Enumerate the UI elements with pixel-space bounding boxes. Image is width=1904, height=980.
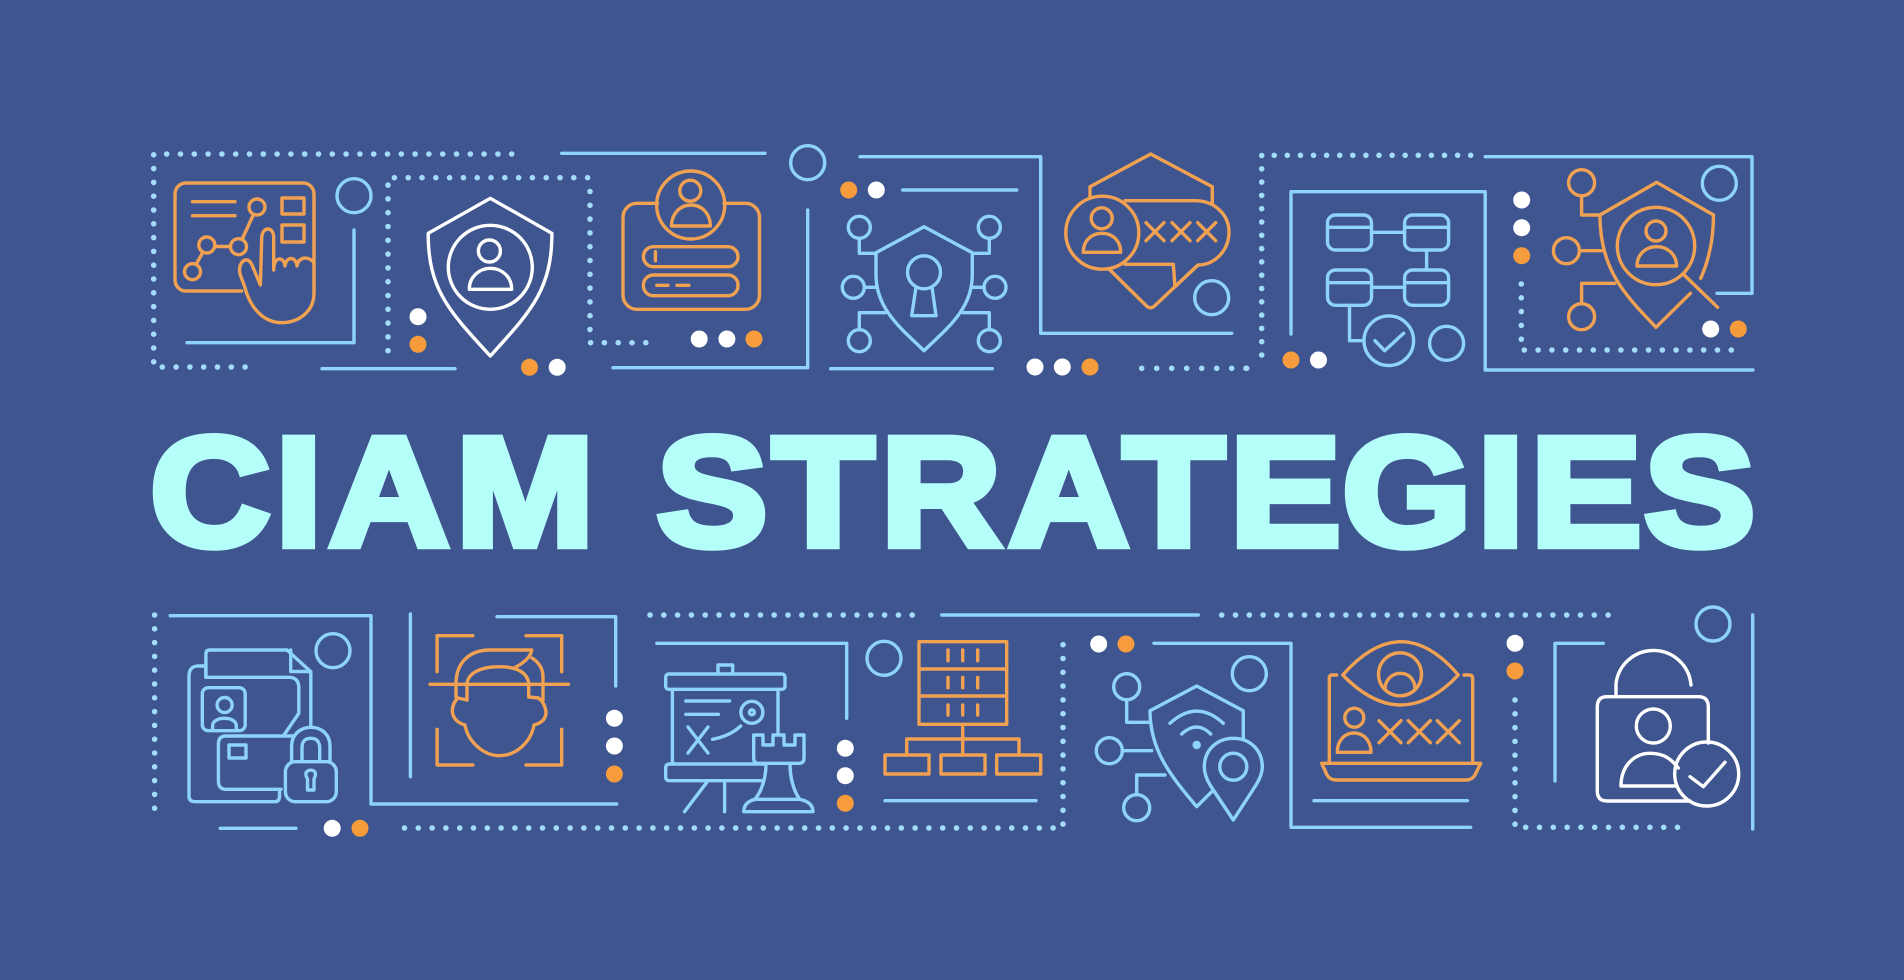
icon: strategy board with rook: [666, 665, 813, 812]
icon: keyhole shield network: [842, 216, 1006, 352]
icon: user shield: [428, 198, 552, 356]
icon: documents, card and padlock: [189, 650, 336, 802]
icon: password envelope: [1066, 154, 1229, 308]
icon: user padlock with check: [1597, 650, 1739, 806]
title: CIAM STRATEGIES: [150, 405, 1755, 578]
top row dots: [410, 182, 1747, 376]
icon: flow diagram with check: [1328, 215, 1449, 366]
icon: login form: [623, 171, 760, 309]
icon: wifi shield with location pin: [1096, 674, 1262, 821]
icon: server hierarchy: [885, 642, 1041, 774]
icon: magnifier shield network: [1553, 170, 1718, 330]
bottom row frames: [155, 607, 1753, 829]
top row frames: [154, 146, 1753, 370]
icon: face recognition: [430, 636, 568, 765]
icon: laptop with eye and password: [1322, 642, 1481, 780]
bottom row dots: [324, 635, 1524, 837]
icon: touch dashboard: [175, 183, 314, 323]
